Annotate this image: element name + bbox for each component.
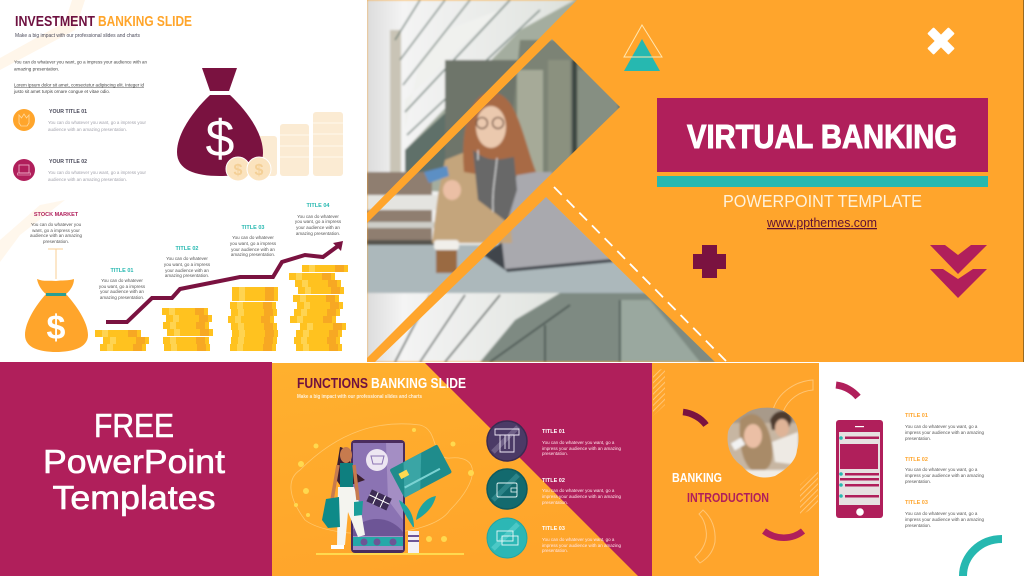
text block: your title 01: audience with an amazing presentation. xyxy=(48,127,127,132)
hair xyxy=(463,92,536,178)
text block: title 03: amazing presentation. xyxy=(231,252,275,257)
text block: your title 02 xyxy=(48,159,146,182)
heading: introduction: INTRODUCTION xyxy=(687,491,769,505)
panel: cover orange background xyxy=(367,0,1024,362)
text block: functions title 03: impress your audience with an amazing xyxy=(542,543,622,548)
icon: money bag xyxy=(177,68,263,176)
coin stack 2 xyxy=(162,308,213,351)
text block: title 03: You can do whatever xyxy=(232,235,274,240)
subtitle: Make a big impact with our professional slides and charts xyxy=(297,394,422,400)
text block: your title 02: YOUR TITLE 02 xyxy=(49,159,87,165)
coin stack 1 xyxy=(95,330,149,351)
icon: phone wireframe xyxy=(836,420,883,518)
text block: your title 01: You can do whatever you want, go a impress your xyxy=(48,120,146,125)
text block: phone title 03: You can do whatever you want, go a xyxy=(905,511,978,516)
text block: intro paragraphs: justo sit amet turpis ornare congue et vitae odio. xyxy=(13,89,110,94)
text block: stock market: You can do whatever you xyxy=(31,222,82,227)
arc: magenta bottom xyxy=(764,531,803,538)
icon: pale coins: $ xyxy=(234,162,243,179)
icon: pale coin stacks xyxy=(258,112,343,176)
text block: phone title 02 xyxy=(905,457,985,484)
text block: title 04: You can do whatever xyxy=(297,214,339,219)
title banner xyxy=(657,98,988,172)
cup xyxy=(434,240,459,250)
text block: stock market: presentation. xyxy=(43,239,69,244)
text block: title 02: you want, go a impress xyxy=(164,262,211,267)
text block: stock market xyxy=(30,212,83,244)
text block: functions title 01: impress your audience with an amazing xyxy=(542,446,622,451)
text block: intro paragraphs: You can do whatever you want, go a impress your audience with an xyxy=(14,60,147,64)
icon: orange money bag with string xyxy=(25,249,88,352)
text block: title 02: your audience with an xyxy=(165,268,209,273)
text block: title 02: amazing presentation. xyxy=(165,273,209,278)
subtitle: Make a big impact with our professional slides and charts xyxy=(15,33,140,39)
text block: functions title 02: You can do whatever you want, go a xyxy=(542,488,615,493)
text block: title 04: your audience with an xyxy=(296,225,340,230)
icon: atm circle xyxy=(487,421,527,461)
text block: phone title 03: TITLE 03 xyxy=(905,500,928,506)
text block: title 04 xyxy=(295,203,342,236)
text block: title 01: you want, go a impress xyxy=(99,284,146,289)
website link: www.ppthemes.com xyxy=(766,216,877,230)
dashed line xyxy=(554,187,726,361)
text block: title 04: amazing presentation. xyxy=(296,231,340,236)
chart: rising trend line with arrow xyxy=(106,241,343,322)
photo: couple in circle xyxy=(726,405,800,480)
text block: title 01: You can do whatever xyxy=(101,278,143,283)
icon: pale coins: $ xyxy=(255,162,264,179)
illustration: potted plant xyxy=(399,496,436,553)
text block: phone title 02: You can do whatever you want, go a xyxy=(905,467,978,472)
text block: your title 02: You can do whatever you want, go a impress your xyxy=(48,170,146,175)
arc: magenta xyxy=(836,385,858,397)
scarf xyxy=(473,150,517,222)
keyboard xyxy=(484,242,506,270)
heading: functions: FUNCTIONS xyxy=(297,375,368,392)
text block: title 02: TITLE 02 xyxy=(176,246,198,252)
laptop xyxy=(500,172,612,270)
text block: title 03: you want, go a impress xyxy=(230,241,277,246)
illustration: decorative outline and sparkles xyxy=(291,424,474,555)
text block: functions title 01: You can do whatever you want, go a xyxy=(542,440,615,445)
text block: title 01: amazing presentation. xyxy=(100,295,144,300)
heading: free powerpoint templates: FREE xyxy=(94,407,174,444)
text block: functions title 01: presentation. xyxy=(542,451,568,456)
text block: phone title 01: TITLE 01 xyxy=(905,413,928,419)
heading: banking slide: BANKING SLIDE xyxy=(98,13,192,30)
lower building strip xyxy=(367,293,727,362)
text block: stock market: STOCK MARKET xyxy=(34,212,79,218)
text block: phone title 03: presentation. xyxy=(905,523,931,528)
icon: white cross xyxy=(920,20,962,62)
teal bar xyxy=(657,176,988,187)
text block: functions title 03: TITLE 03 xyxy=(542,526,565,532)
text block: stock market: want, go a impress your xyxy=(32,228,80,233)
text block: title 04: TITLE 04 xyxy=(307,203,330,209)
icon: wallet circle xyxy=(487,469,527,509)
icon: pale coins xyxy=(226,157,271,181)
heading: investment: INVESTMENT xyxy=(15,13,95,30)
face xyxy=(476,106,506,148)
text block: title 01: TITLE 01 xyxy=(111,268,133,274)
text block: intro paragraphs: Lorem ipsum dolor sit amet, consectetur adipiscing elit. Integer id xyxy=(14,82,144,88)
text block: title 01: your audience with an xyxy=(100,289,144,294)
text block: functions title 02: TITLE 02 xyxy=(542,478,565,484)
text block: your title 01 xyxy=(48,109,146,132)
earphone wire xyxy=(478,150,497,212)
icon: orange money bag with string: $ xyxy=(47,309,66,347)
text block: phone title 01: You can do whatever you want, go a xyxy=(905,424,978,429)
text block: stock market: audience with an amazing xyxy=(30,233,83,238)
text block: phone title 02: TITLE 02 xyxy=(905,457,928,463)
arc: teal xyxy=(963,539,1002,576)
icon: triangle pair xyxy=(624,25,662,71)
text block: intro paragraphs: amazing presentation. xyxy=(14,66,59,72)
panel: phone features slide xyxy=(819,363,1024,576)
decorative pale arcs and hatching xyxy=(653,368,818,563)
hand xyxy=(443,180,461,200)
text block: functions title 01: TITLE 01 xyxy=(542,429,565,435)
icon: money bag: $ xyxy=(206,110,235,168)
text block: title 03 xyxy=(230,225,277,257)
text block: functions title 03: presentation. xyxy=(542,548,568,553)
right edge rule xyxy=(1023,0,1024,362)
text block: title 04: you want, go a impress xyxy=(295,219,342,224)
text block: title 03: your audience with an xyxy=(231,247,275,252)
icon: orange badge xyxy=(13,109,35,131)
panel: investment banking slide xyxy=(0,0,367,362)
heading: free powerpoint templates: PowerPoint xyxy=(43,443,225,480)
text block: title 03: TITLE 03 xyxy=(242,225,264,231)
coin stack 3 xyxy=(228,287,278,351)
text block: functions title 01 xyxy=(542,429,622,456)
title banner: VIRTUAL BANKING xyxy=(687,118,957,155)
panel: free powerpoint templates xyxy=(0,362,272,576)
heading: free powerpoint templates xyxy=(43,407,225,516)
heading: banking slide: BANKING SLIDE xyxy=(371,375,466,392)
text block: phone title 02: presentation. xyxy=(905,479,931,484)
glasses xyxy=(476,118,504,128)
text block: phone title 03 xyxy=(905,500,985,528)
text block: phone title 01: impress your audience with an amazing xyxy=(905,430,985,435)
arc: plum xyxy=(683,412,706,425)
panel: stock market slide xyxy=(0,200,348,352)
icon: cards circle xyxy=(487,518,527,558)
text block: phone title 02: impress your audience with an amazing xyxy=(905,473,985,478)
panel: banking introduction xyxy=(650,363,819,576)
icon: double chevron xyxy=(930,245,987,298)
text block: title 02: You can do whatever xyxy=(166,256,208,261)
text block: title 02 xyxy=(164,246,211,278)
text block: phone title 01: presentation. xyxy=(905,436,931,441)
illustration: credit card xyxy=(389,444,452,498)
text block: functions title 02: impress your audience with an amazing xyxy=(542,494,622,499)
heading: banking: BANKING xyxy=(672,471,722,485)
text block: your title 01: YOUR TITLE 01 xyxy=(49,109,87,115)
icon: plum plus xyxy=(693,245,726,278)
text block: functions title 03: You can do whatever you want, go a xyxy=(542,537,615,542)
text block: functions title 02: presentation. xyxy=(542,500,568,505)
text block: phone title 03: impress your audience with an amazing xyxy=(905,517,985,522)
text block: functions title 03 xyxy=(542,526,622,553)
text block: phone title 01 xyxy=(905,413,985,441)
icon: magenta badge xyxy=(13,159,35,181)
heading: free powerpoint templates: Templates xyxy=(52,479,216,516)
coin stack 4 xyxy=(289,265,348,351)
panel: functions banking slide xyxy=(272,363,652,576)
coat xyxy=(432,150,512,243)
text block: title 01 xyxy=(99,268,146,300)
text block: intro paragraphs xyxy=(13,60,147,94)
illustration: woman with shopping bags xyxy=(322,447,365,549)
text block: functions title 02 xyxy=(542,478,622,505)
subtitle: powerpoint template: POWERPOINT TEMPLATE xyxy=(723,191,922,211)
photo: woman with credit card at laptop xyxy=(367,0,727,362)
text block: your title 02: audience with an amazing presentation. xyxy=(48,177,127,182)
illustration: phone xyxy=(351,440,405,553)
